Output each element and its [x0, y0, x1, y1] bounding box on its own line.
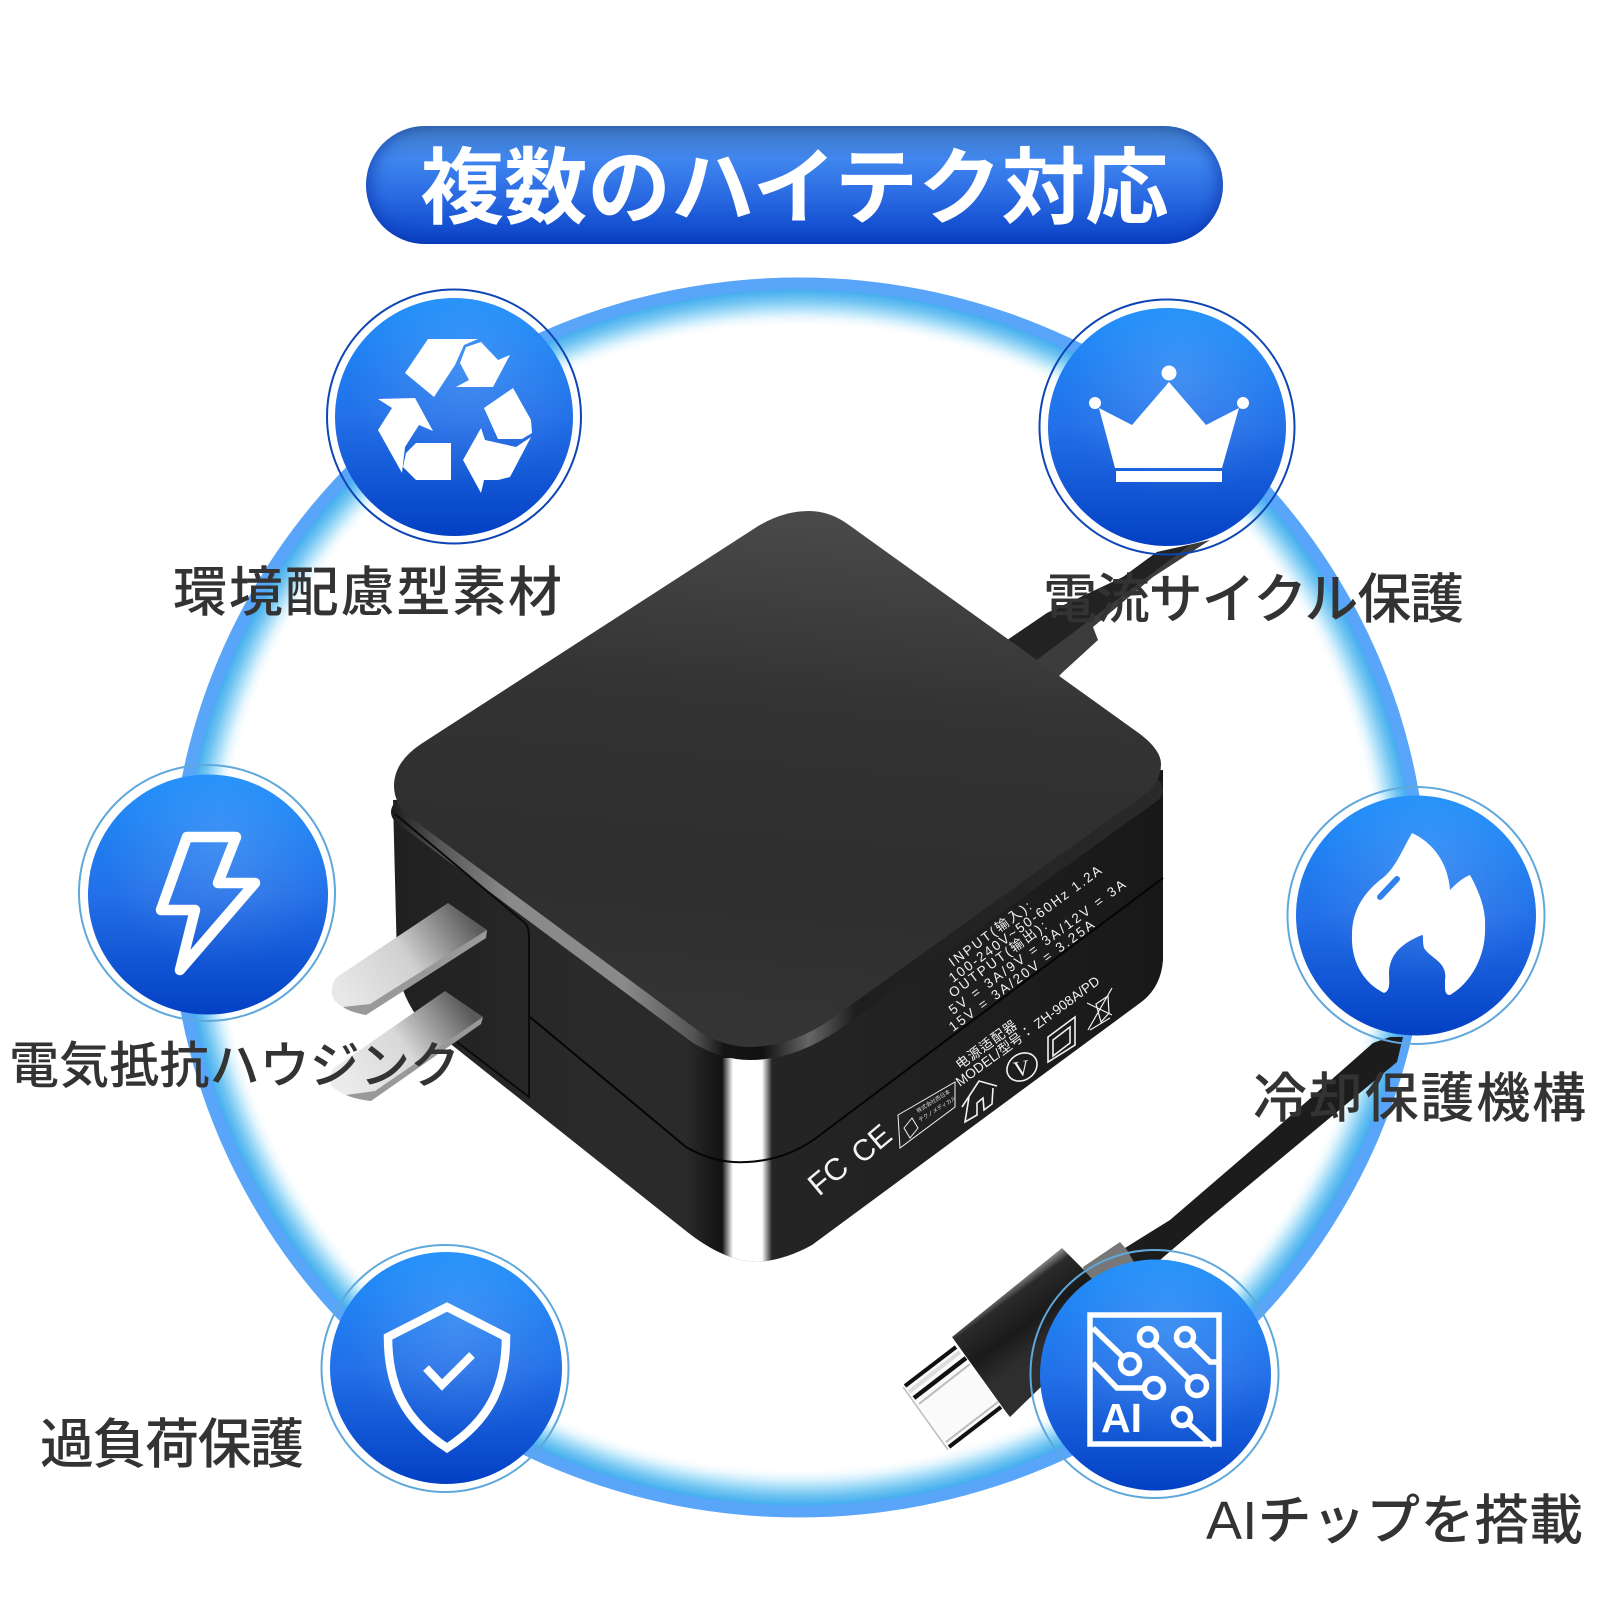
- icon: recycle: [378, 339, 532, 493]
- feature: recycle: [327, 290, 581, 544]
- label: electrical resistance housing: 電気抵抗ハウジンク: [9, 1038, 460, 1094]
- chip badge ring: [1030, 1250, 1278, 1498]
- feature: AI chip: [1030, 1250, 1278, 1498]
- label: AI chip equipped: AIチップを搭載: [1206, 1491, 1583, 1551]
- specification text: MODEL/型号： ZH-908A/PD: [953, 973, 1103, 1089]
- label: current cycle protection: 電流サイクル保護: [1043, 570, 1464, 630]
- chip badge disk: [1040, 1260, 1271, 1490]
- prong upper: [332, 903, 487, 1015]
- double insulated mark: [1048, 1017, 1075, 1062]
- bolt badge ring: [79, 765, 335, 1021]
- top face rim: [404, 790, 1150, 1047]
- prong lower: [330, 991, 483, 1101]
- icon: AI circuit: [1090, 1315, 1220, 1446]
- PSE label: 株式会社西日本: [915, 1087, 952, 1115]
- specification text: 15V = 3A/20V = 3.25A: [946, 917, 1097, 1034]
- shield badge ring: [322, 1245, 568, 1492]
- feature: crown: [1040, 300, 1294, 554]
- FCC mark: FC: [801, 1149, 855, 1202]
- USB-C connector: [903, 1242, 1150, 1450]
- title banner: 複数のハイテク対応: [420, 141, 1169, 235]
- specification text: [946, 863, 1128, 1089]
- charging cable (upper, behind adapter): [1000, 540, 1210, 685]
- recycle badge ring: [327, 290, 581, 544]
- specification text: 5V = 3A/9V = 3A/12V = 3A: [946, 877, 1128, 1017]
- crown badge ring: [1040, 300, 1294, 554]
- icon: shield with check: [388, 1307, 506, 1448]
- label: overload protection: 過負荷保護: [40, 1415, 304, 1475]
- icon: crown: [1089, 366, 1249, 482]
- plug panel outline: [395, 814, 529, 1097]
- PSE label: テクノメディカル: [917, 1094, 958, 1124]
- label: eco materials: 環境配慮型素材: [173, 563, 562, 623]
- charging cable (lower): [1120, 1037, 1403, 1283]
- flame badge disk: [1296, 796, 1536, 1036]
- adapter body sides: [393, 770, 1163, 1262]
- specification text: INPUT(输入):: [946, 898, 1034, 969]
- metal corner reflection: [722, 1058, 772, 1264]
- power adapter: [330, 511, 1163, 1264]
- crown badge disk: [1048, 308, 1286, 546]
- CE mark: CE: [845, 1118, 898, 1170]
- flame badge ring: [1288, 787, 1544, 1044]
- certification marks: [801, 988, 1112, 1202]
- title banner: [366, 126, 1223, 244]
- feature: lightning bolt: [79, 765, 335, 1021]
- specification text: 电源适配器: [953, 1017, 1020, 1072]
- label: cooling protection: 冷却保護機構: [1253, 1069, 1586, 1129]
- recycle badge disk: [335, 298, 573, 536]
- shield badge disk: [330, 1252, 562, 1484]
- class V mark: V: [1012, 1055, 1032, 1082]
- top face: [394, 511, 1161, 1047]
- strain relief: [1083, 1242, 1150, 1300]
- house mark: [962, 1081, 997, 1122]
- icon: lightning bolt: [161, 837, 255, 970]
- icon: AI circuit: AI: [1101, 1395, 1142, 1441]
- feature: shield: [322, 1245, 568, 1492]
- icon: flame: [1352, 833, 1485, 995]
- overmold: [952, 1248, 1120, 1417]
- feature: flame: [1288, 787, 1544, 1044]
- specification text: OUTPUT(输出):: [946, 918, 1050, 1000]
- blue glowing ring: [170, 278, 1428, 1518]
- class V mark: [1001, 1047, 1043, 1087]
- specification text: 100-240V~50-60Hz 1.2A: [946, 863, 1104, 985]
- metal plug: [903, 1347, 1005, 1450]
- body seam: [530, 878, 1163, 1162]
- WEEE bin mark: [1087, 988, 1112, 1030]
- PSE label: [898, 1082, 958, 1148]
- bolt badge disk: [88, 774, 328, 1014]
